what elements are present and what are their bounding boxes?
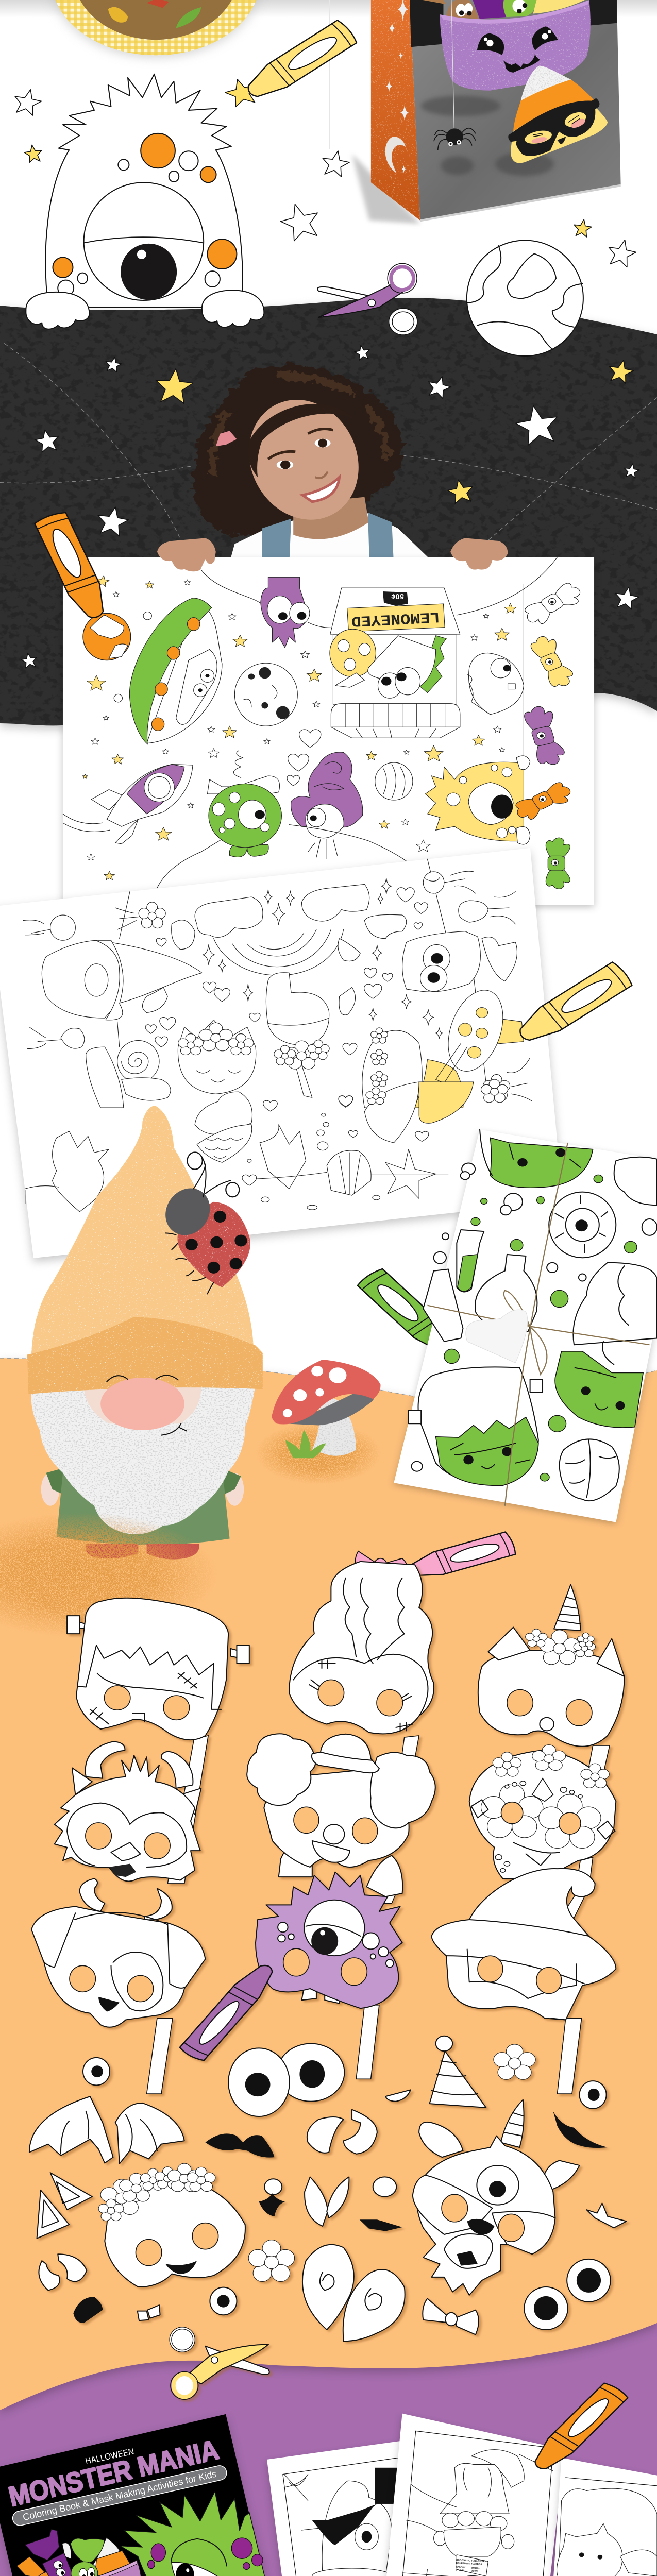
- booth sign: [347, 604, 445, 632]
- girl hands on poster: [157, 538, 508, 571]
- mask bow: [355, 1551, 408, 1578]
- seaweed, shells and starfish: [25, 1092, 448, 1212]
- yellow monster: [425, 756, 530, 844]
- bag soft shadows: [421, 96, 554, 176]
- bag side moon: [385, 137, 406, 174]
- booth basket: [331, 704, 460, 738]
- large frankenstein face: [418, 1367, 538, 1484]
- twine: [427, 1143, 649, 1506]
- snail shell halves: [302, 2245, 405, 2341]
- horned wolf mask: [55, 1741, 201, 1882]
- loose eye: [83, 2058, 110, 2085]
- upside down gnome: [42, 940, 202, 1020]
- section one artwork: [0, 19, 657, 567]
- gnome face lines: [107, 1376, 187, 1435]
- green crayon: [356, 1267, 461, 1358]
- small parts: [39, 2081, 627, 2323]
- small poster stars: [82, 575, 516, 880]
- poster two: fantasy colouring page: [0, 848, 634, 1258]
- ladybug: [160, 1152, 250, 1294]
- gnome: [27, 1106, 263, 1560]
- curly white monster: [467, 653, 524, 715]
- cover base: [0, 2414, 296, 2576]
- gnome beard: [31, 1384, 256, 1534]
- button eyes: [524, 2259, 611, 2330]
- hair curl highlights: [213, 376, 388, 477]
- lemonade sign text: LEMONEYED: [351, 608, 440, 630]
- purple hair monster: [291, 752, 363, 859]
- monster paws: [26, 290, 264, 329]
- outlined stars: [11, 87, 638, 268]
- white planet: [467, 241, 583, 356]
- lines: [117, 859, 486, 1083]
- treat bag: [352, 0, 621, 224]
- gnome arms and tunic: [41, 1473, 59, 1506]
- purple background: [0, 2267, 657, 2576]
- owl: [402, 931, 517, 992]
- monster eye: [84, 182, 204, 300]
- upside down unicorn: [266, 939, 360, 1097]
- halloween label: HALLOWEEN: [85, 2446, 135, 2466]
- green cyclops monster: [208, 751, 281, 857]
- salon magazine text: BOUFFANTS: [456, 2562, 470, 2565]
- salon magazine text: BOO-TASTIC: [456, 2558, 471, 2562]
- salon magazine text: HALLOWEEN: [471, 2560, 486, 2563]
- orange edge stitching: [0, 1358, 657, 1399]
- fairy with yellow dress: [362, 985, 524, 1108]
- salon magazine text: [456, 2558, 486, 2573]
- sparkles and hearts: [145, 878, 443, 1107]
- orange crayon: [33, 511, 113, 622]
- rainbow: [214, 929, 344, 975]
- price tag: [383, 591, 408, 606]
- bride mask: [289, 1562, 434, 1734]
- cat ears: [37, 2173, 92, 2239]
- cover text: [6, 2434, 228, 2527]
- bag side: [371, 0, 420, 221]
- gnome shoes: [86, 1544, 199, 1560]
- hills: [157, 825, 409, 888]
- small flower: [494, 2044, 535, 2079]
- white hanging string: [329, 0, 330, 149]
- dog mask: [31, 1878, 205, 2027]
- bag night panels: [410, 0, 443, 47]
- clouds: [172, 884, 407, 950]
- page: bat: [549, 2458, 657, 2576]
- colouring pages: [194, 2381, 657, 2576]
- eyes and smile: [268, 429, 340, 502]
- salon magazine text: HAIRDOS: [471, 2563, 482, 2566]
- gnome hat: [31, 1106, 254, 1353]
- dashed seam lines: [0, 343, 657, 542]
- wood planet: [375, 762, 413, 800]
- wavy hair panel: [573, 1263, 657, 1345]
- subtitle pill: Coloring Book & Mask Making Activities for Kids: [22, 2468, 217, 2522]
- bat wings: [29, 2096, 184, 2164]
- orange planet: [83, 613, 131, 660]
- page: pirate: [267, 2441, 419, 2576]
- brains: [614, 1157, 657, 1205]
- purple crayon: [178, 1960, 281, 2062]
- plate with autumn leaves: [50, 0, 261, 58]
- hair clip: [216, 431, 237, 446]
- face: [234, 389, 373, 530]
- mask sticks: [147, 1736, 610, 2094]
- orange crayon on pages: [527, 2381, 630, 2475]
- clown mask: [247, 1734, 435, 1896]
- black moustaches: [205, 2111, 608, 2158]
- poster one: monsters colouring page: [20, 511, 641, 905]
- snail and kitty mermaid: [86, 1020, 256, 1108]
- pages pirate, bride and bat: [267, 2414, 657, 2576]
- witch mask: [432, 1869, 616, 2020]
- bat wing ribs: [61, 2111, 157, 2154]
- poster two line art lower: [25, 1079, 508, 1212]
- green monster: [120, 2492, 265, 2576]
- monster spots: [53, 133, 237, 278]
- salon magazine text: BRIDAL: [471, 2567, 480, 2569]
- bucket face: [477, 26, 558, 73]
- white unicorn wolf mask: [413, 2100, 580, 2295]
- yellow crayon and star: [222, 19, 359, 108]
- giant eye: [549, 1192, 616, 1258]
- monster mania title: MONSTER MANIA: [6, 2434, 222, 2513]
- top shadow strip: [0, 0, 657, 18]
- bucket with sweets: [17, 2529, 142, 2576]
- salon magazine text: STYLES: [456, 2569, 465, 2572]
- dark night band: [0, 298, 657, 725]
- poster two line art upper: [23, 859, 634, 1108]
- gift wrapped in monster paper: [394, 1129, 657, 1522]
- sand under gnome: [0, 1512, 218, 1637]
- flower crown skull mask: [98, 2163, 245, 2287]
- girl photo: [193, 364, 438, 567]
- frankenstein mask: [67, 1598, 249, 1740]
- gnome nose: [100, 1378, 184, 1430]
- gnome hat band: [27, 1317, 263, 1394]
- white bow: [423, 2298, 479, 2335]
- fairy skirt remnant: [364, 1079, 508, 1143]
- strings: [201, 557, 557, 769]
- spider and thread: [434, 0, 475, 150]
- salon magazine text: BOWS: [471, 2570, 478, 2572]
- purple monster mask: [256, 1872, 402, 2008]
- lollipops flowers and tulips: [23, 871, 532, 1101]
- neck and shirt: [228, 513, 438, 567]
- hanging candies: [512, 580, 586, 889]
- booth monsters: [330, 629, 376, 677]
- monster peeking from behind: [45, 74, 243, 307]
- band stars: [33, 344, 640, 537]
- bag side stars: [386, 0, 409, 174]
- yellow scissors: [171, 2328, 269, 2399]
- yellow crayon on poster two: [512, 961, 634, 1048]
- orange background: [0, 1358, 657, 2410]
- flasks and test tube: [423, 1269, 463, 1342]
- heart gift tag: [466, 1310, 528, 1363]
- candy corn with mask: [508, 66, 608, 163]
- mushroom and ground sand: [256, 1360, 381, 1484]
- party hat: [429, 2036, 486, 2108]
- lemonade booth: [330, 588, 460, 738]
- pumpkin bucket: [440, 0, 591, 91]
- page: vampire bride in salon: [379, 2414, 565, 2576]
- green bubbles: [444, 1175, 637, 1481]
- band stars over right edge: [20, 585, 641, 669]
- masks section: [31, 1562, 625, 2116]
- book cover: [0, 2414, 296, 2576]
- sugar skull mask: [469, 1745, 616, 1878]
- bag front: [410, 0, 621, 221]
- unicorn cat mask: [478, 1585, 625, 1747]
- price tag: 50¢: [391, 592, 404, 601]
- gnome and gift section: [0, 1106, 657, 1637]
- poster hearts: [287, 730, 321, 786]
- bag shadow: [352, 154, 420, 224]
- mask parts section: [29, 2081, 627, 2399]
- curly horns: [307, 2110, 377, 2154]
- purple scissors: [317, 263, 417, 333]
- pink crayon: [405, 1531, 517, 1582]
- hair: [193, 364, 402, 536]
- big google eyes: [228, 2043, 344, 2116]
- rocket: [63, 765, 193, 844]
- UFO: [114, 598, 222, 744]
- salon magazine text: SPOOKY: [456, 2566, 466, 2569]
- frankenstein heads: [490, 1138, 593, 1188]
- purple squid monster: [261, 577, 310, 648]
- moon: [234, 663, 297, 726]
- bag sweets: [423, 0, 585, 19]
- overall straps: [262, 519, 291, 567]
